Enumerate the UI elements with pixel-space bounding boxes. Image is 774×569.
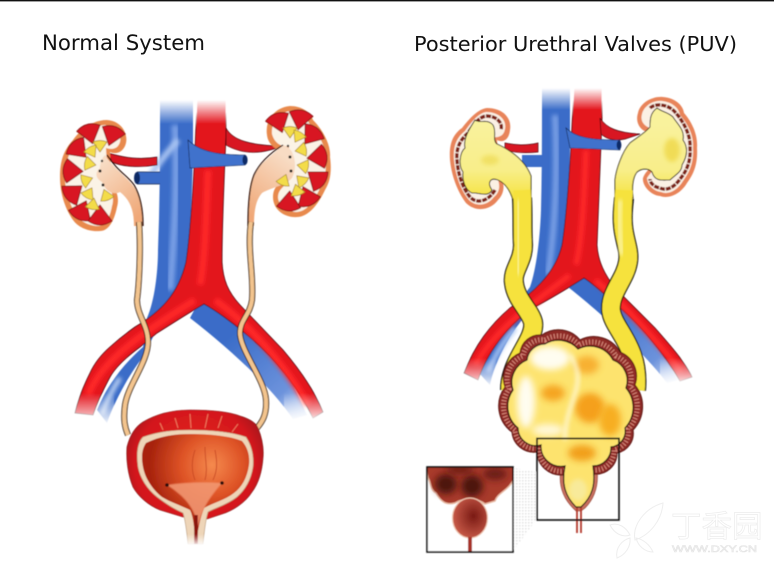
urethra end fade [180,534,210,546]
vena cava [97,100,193,423]
right ureter [240,222,266,428]
watermark leaf icon [610,503,663,558]
bladder lumen with urine [508,340,633,507]
right iliac vein [190,290,307,419]
vena cava [478,88,570,385]
left kidney, normal [59,120,143,231]
calyces [276,126,310,197]
renal arteries [108,128,285,167]
right kidney, normal [248,106,331,226]
zoom square over bladder outlet [537,438,619,520]
right iliac vein [568,262,678,383]
aorta and iliac arteries [75,100,323,418]
title: Posterior Urethral Valves (PUV): Posterior Urethral Valves (PUV) [414,32,737,56]
left kidney, hydronephrosis [450,108,531,209]
watermark Chinese name: 丁香园 [671,510,762,544]
urethral lumen [194,515,198,544]
watermark URL: WWW.DXY.CN [672,544,757,555]
vessel end fades [66,393,330,426]
urine highlights and folds [517,346,621,501]
bladder cavity [142,434,249,543]
diagram: normal urinary system [59,100,331,546]
right kidney, hydronephrosis [615,97,697,198]
trigone [167,482,222,527]
bladder neck wall [560,468,598,511]
aorta and iliac arteries [464,88,692,381]
calyces [79,140,114,211]
distended trabeculated bladder [499,330,643,533]
right renal vein [566,128,621,150]
left dilated ureter [510,190,533,390]
vessel end fades [458,358,698,388]
watermark: DXY logo [610,503,762,558]
magnifier funnel [514,468,536,550]
right dilated ureter [611,190,636,390]
ureteric orifices [165,481,224,487]
title: Normal System: Normal System [42,31,205,56]
right renal vein [188,140,248,168]
diagram: posterior urethral valves [426,88,698,552]
narrowed urethra [468,537,472,552]
left renal vein [134,172,162,184]
thick muscular wall [499,330,643,475]
urethra [577,506,581,533]
renal pyramids [59,121,127,225]
wall hatching [503,336,637,471]
dilated posterior urethra [452,498,488,538]
bladder wall lining [137,430,253,544]
renal arteries [505,118,640,153]
inset: posterior urethral valve detail [426,466,514,552]
bladder floor [426,466,514,504]
left ureter [124,222,148,435]
dilated yellow renal pelvis [615,108,687,198]
top border line [0,0,774,1]
normal bladder [127,410,263,546]
dilated yellow renal pelvis [460,120,531,200]
renal pyramids [264,108,331,212]
